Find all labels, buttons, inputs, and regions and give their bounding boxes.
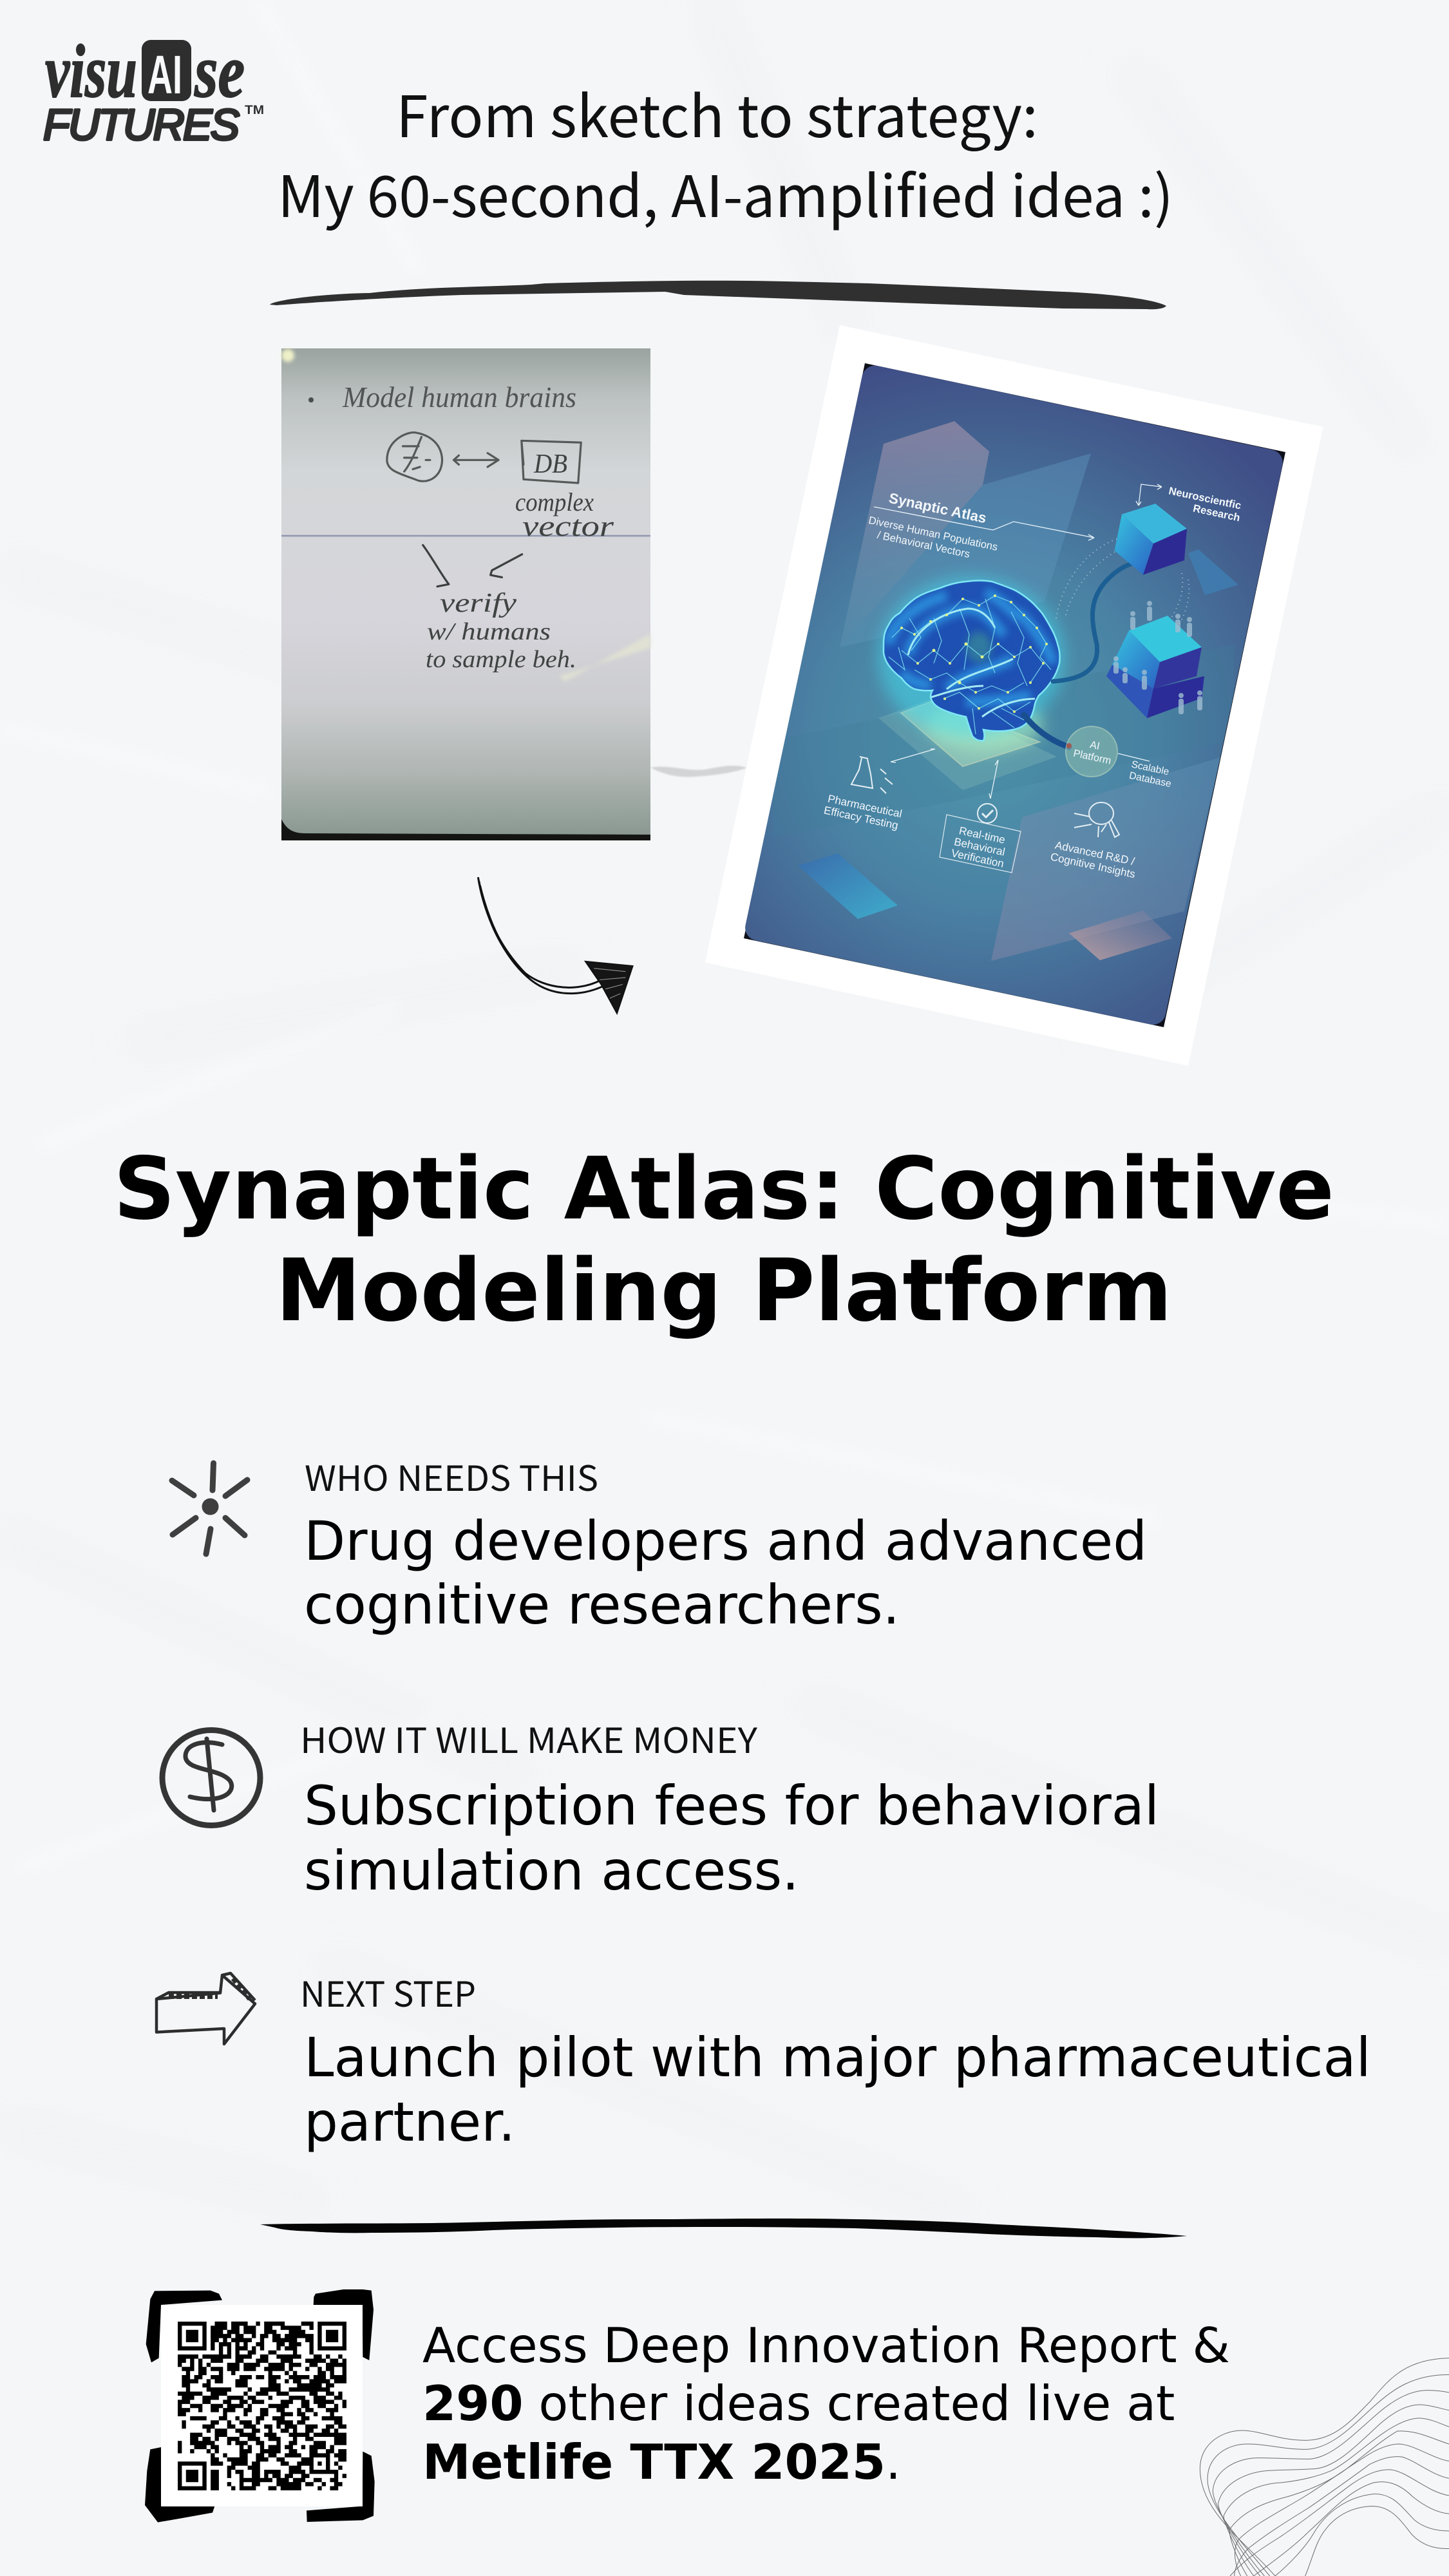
poster labels: Research [1192,502,1241,524]
AI platform sphere: Platform [1072,748,1112,767]
icon: sketched arrow [156,1973,255,2044]
poster labels: / Behavioral Vectors [876,529,971,560]
text block: who needs this [304,1450,1147,1636]
text block: how it will make money: HOW IT WILL MAKE MONEY [300,1712,757,1763]
main title: Modeling Platform [276,1240,1172,1341]
lower database cube with people [1106,601,1204,718]
poster artwork [745,366,1283,1025]
panel: QR code with brush corners [145,2289,375,2523]
poster icons: check, flask, magnifier [851,757,1119,837]
poster labels [823,485,1242,880]
text block: next step: NEXT STEP [300,1966,476,2017]
top heading [278,71,1173,234]
poster labels: Cognitive Insights [1049,851,1137,880]
poster labels: Synaptic Atlas [887,490,988,526]
decorative line wave [1200,2358,1449,2576]
brush stroke divider top [270,281,1166,309]
logo: visuAIse Futures [43,29,264,149]
icon: sun burst [172,1463,247,1554]
sketch handwriting: w/ humans [427,618,551,645]
poster corners backing [744,363,1285,1027]
panel: tilted Synaptic Atlas poster [705,325,1323,1066]
poster connector lines [874,484,1162,799]
arrow: sketch to poster [478,877,633,1014]
sketch handwriting: verify [440,589,516,618]
panel: hand-drawn sketch photo [281,348,650,840]
AI platform sphere: AI [1089,739,1101,752]
QR brush corners [145,2289,375,2523]
logo: visuAIse Futures: FUTURES [43,100,240,149]
QR code modules [178,2322,346,2490]
sketch handwriting [308,381,614,673]
poster labels: Neuroscientfic [1168,485,1242,512]
logo: visuAIse Futures: AI [147,44,182,105]
sketch handwriting: complex [515,488,594,516]
text block: how it will make money: Subscription fees for behavioral [304,1775,1159,1837]
call to action text [422,2317,1230,2490]
icon: dollar coin [162,1730,260,1825]
brush stroke divider bottom [260,2219,1187,2238]
poster labels: Scalable [1130,759,1170,777]
brain [876,573,1069,747]
poster white frame [705,325,1323,1066]
text block: who needs this: cognitive researchers. [304,1574,900,1636]
text block: how it will make money [300,1712,1159,1902]
text block: next step: partner. [304,2091,515,2154]
text block: next step [300,1966,1371,2154]
logo: visuAIse Futures: visu [45,29,137,113]
sketch diagram: brain, database and arrows [387,432,581,587]
text block: who needs this: WHO NEEDS THIS [305,1450,598,1501]
poster labels: Real-time [958,824,1007,846]
top heading: From sketch to strategy: [396,71,1038,154]
text block: who needs this: Drug developers and advanced [304,1510,1147,1573]
logo: visuAIse Futures: TM [245,104,264,117]
poster labels: Advanced R&D / [1054,839,1136,867]
QR code white card [161,2305,363,2506]
poster labels: Database [1128,770,1172,790]
text block: how it will make money: simulation access. [304,1840,799,1902]
call to action text: 290 other ideas created live at [422,2375,1175,2432]
top heading: My 60-second, AI-amplified idea :) [278,151,1173,234]
poster labels: Verification [950,847,1005,870]
upper database cube [1114,504,1187,574]
particle arcs [1056,538,1190,623]
connector tubes [1024,563,1135,747]
main title [113,1139,1334,1341]
poster labels: Behavioral [953,835,1006,858]
sketch handwriting: to sample beh. [426,646,576,673]
AI platform sphere [1066,726,1117,777]
poster labels: Diverse Human Populations [867,515,999,553]
sketch handwriting: Model human brains [342,381,576,413]
logo: visuAIse Futures: se [194,29,245,113]
sketch handwriting: DB [533,450,567,479]
text block: next step: Launch pilot with major pharmaceutical [304,2027,1371,2089]
sketch handwriting: vector [522,509,614,542]
poster labels: Efficacy Testing [823,804,899,832]
poster labels: Pharmaceutical [827,793,903,820]
glowing platform [878,698,1057,790]
call to action text: Access Deep Innovation Report & [422,2317,1230,2374]
call to action text: Metlife TTX 2025. [422,2434,901,2490]
main title: Synaptic Atlas: Cognitive [113,1139,1334,1239]
